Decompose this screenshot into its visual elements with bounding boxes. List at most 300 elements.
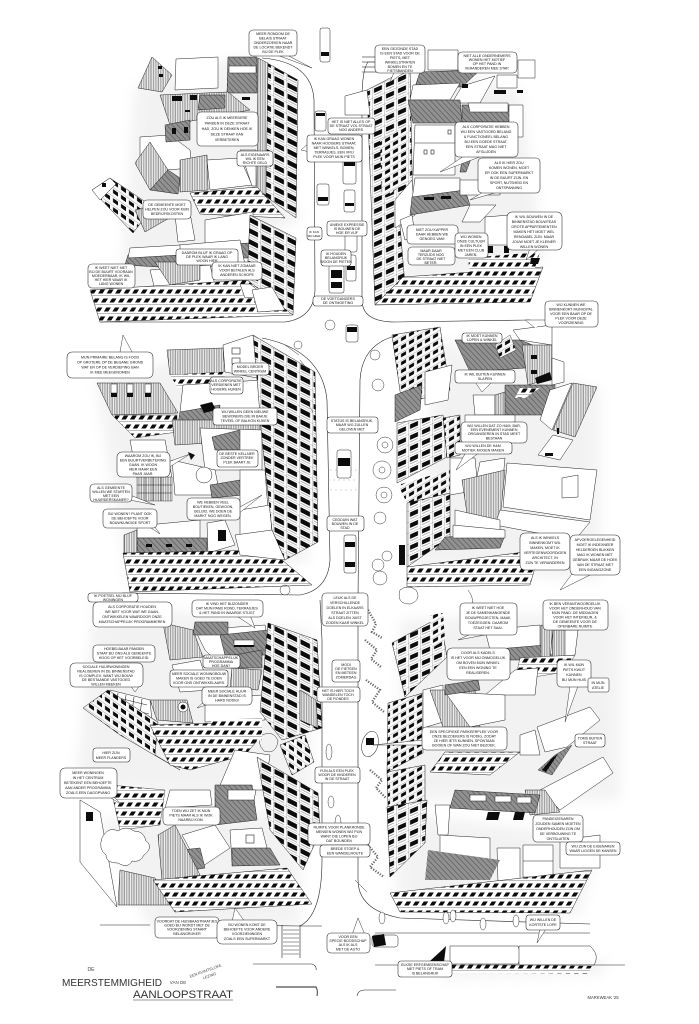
callout: meerdere panden: PANDEN IN DEZE STRAAT: [205, 122, 250, 126]
callout: erfgemeenschap: ELKSE ERFGEMEENSCHAP: [401, 963, 449, 967]
callout: bijzonder: & HET PAND IN WAARDE STIJGT: [199, 611, 256, 615]
callout: piets kwijt: [557, 660, 591, 722]
callout: samenhangende: JE DE SAMENHANGENDE: [466, 611, 511, 615]
callout: mij hier: [307, 227, 322, 240]
callout: huurderskamer: HUURDERSKAMER?: [93, 498, 129, 502]
block NW upper: long facade: [257, 58, 298, 218]
callout: buurtverbetering: WAAROM ZOU IK, BIJ: [125, 454, 162, 458]
callout: erfgemeenschap: [398, 961, 452, 977]
callout: beste kelner: [217, 450, 258, 467]
callout: afvoergelegenheid: MOET IK INDEXNEER: [577, 543, 614, 547]
block NW lower: [90, 215, 296, 322]
callout: primaire belang: [67, 335, 153, 378]
callout: kapper: NIET ZOU KAPPER: [416, 228, 449, 232]
callout: primaire belang: IK MEE MEEGENOMEN: [90, 370, 130, 374]
callout: graag wonen: MET WINKELS, BOMEN,: [314, 146, 354, 150]
callout: gezonde stad: WINKELSTRATEN: [385, 60, 416, 64]
callout: pandeigenaren: [533, 815, 583, 842]
callout: boutieken: BOUTIEKEN, GEWOON,: [193, 505, 233, 509]
callout: pieten: BELANGRIJK: [325, 256, 348, 260]
callout: binnenstad bouwen: WILLEN WONEN: [520, 245, 548, 249]
callout: pieten: [320, 250, 352, 266]
callout: boutieken: [187, 495, 262, 520]
callout: graag wonen: TERRASJES, EEN VRIJ: [314, 150, 354, 154]
callout: supermarkt: ONTSPANNING: [496, 186, 522, 190]
callout: leuk verschillende doelen: DOELEN IN ELKAARS: [327, 606, 364, 610]
callout: ruimte plankronde: WANT DIE LOPEN BIJ: [321, 834, 358, 838]
callout: huurwoningen: WILLEN MEEKEN: [91, 682, 121, 686]
callout: fiets: NAARBIJ KOM.: [178, 818, 204, 822]
callout: supermarkt: KOMEN WONEN, MOET: [489, 166, 530, 170]
callout: leuk verschillende doelen: ALS DOELEN JUIST: [328, 616, 363, 620]
callout: belais straat: ONDERZOEKEN NAAR: [254, 41, 293, 45]
callout: supermarkt: [470, 158, 540, 200]
callout: winkels maakel: MAKEN, MOET IK: [530, 546, 560, 550]
callout: gezonde stad: IS EEN STAD VOOR DE: [380, 52, 420, 56]
callout: bij de buurt: [88, 264, 135, 288]
callout: meerdere panden: DEZE STRAAT KAN: [211, 132, 244, 136]
callout: huurwoningen: SOCIALE HUURWONINGEN: [82, 665, 130, 669]
block SW lower: front row: [153, 868, 312, 912]
callout: piets kwijt: KUNNEN: [566, 673, 582, 677]
block NW upper: roofs: [135, 57, 257, 194]
callout: corporatie vastgoed: & FUNCTIONEEL BELANG: [464, 135, 508, 139]
callout: afvoergelegenheid: HELDERDEN BLIKKEN: [576, 548, 615, 552]
callout: afvoergelegenheid: MAG IK WONEN MET: [577, 553, 614, 557]
callout: binnenstad bouwen: IK WIL BOUWEN IN DE: [515, 215, 554, 219]
callout: afvoergelegenheid: EEN INGANGZONE: [579, 568, 612, 572]
callout: straat niet beter: [408, 247, 455, 265]
callout: graag wonen: PLEK VOOR MIJN PIETS: [313, 155, 355, 159]
callout: samenhangende: [458, 603, 517, 640]
callout: huurderskamer: ALS GEMEENTE: [97, 486, 126, 490]
callout: cultuur: ONZE CULTUUR: [457, 240, 485, 244]
callout: meerdere panden: [197, 112, 258, 146]
callout: sociale woningbouw: MEER SOCIALE WONINGBOUW: [172, 672, 227, 676]
callout: boutieken: GELUID, WE DOEN DE: [194, 510, 233, 514]
callout: binnenkort: [525, 301, 598, 328]
callout: ruimte plankronde: RUIMTE VOOR PLANKRONDE: [313, 826, 365, 830]
block centre-west: roofs: [97, 335, 272, 535]
callout: corporatie ontwikkelen: MAATSCHAPPELIJK PROGRAMMEREN: [99, 620, 166, 624]
callout: zomerdag: ZOMERDAG: [336, 676, 357, 680]
callout: straat alles: [328, 118, 375, 134]
callout: huurwoningen: DE BESTAANDE VASTGOED: [82, 678, 130, 682]
callout: afvoergelegenheid: [560, 535, 620, 590]
callout: cultuur: WIJ WONEN: [461, 235, 482, 239]
callout: huurderskamer: WILLEN WE STARTEN: [92, 490, 130, 494]
callout: supermarkt behoefte: VOORZIENINGEN: [232, 932, 262, 936]
callout: daarom blijf ik: WOON HIER: [196, 259, 218, 263]
title: DE: [88, 967, 95, 973]
callout: evenement: BESTAAN: [486, 436, 503, 440]
callout: voorziening: VOORDAT DE HUISBAASTRAATJES: [157, 920, 218, 924]
callout: kapper: GENOEG VAN!: [420, 237, 444, 241]
callout: winkels maakel: [520, 533, 570, 570]
block SE lower: [387, 765, 600, 882]
callout: ruimte plankronde: [308, 823, 370, 845]
callout: balkon: BEWONERS DIE IN BAKJE: [223, 414, 268, 418]
callout: supermarkt behoefte: BIJ WONEN KOMT DE: [228, 923, 266, 927]
callout: status belangrijk: [327, 417, 378, 433]
callout: huurwoningen: REALISEREN IN DE BINNENSTAD: [77, 670, 135, 674]
callout: mij hier: MIJ HIER: [308, 234, 321, 238]
callout: bijzonder: DAT MIJN PAND ROND, TERRASJES: [196, 606, 258, 610]
callout: graag wonen: [301, 135, 362, 162]
callout: afvoergelegenheid: VAN DE STRAAT MET: [577, 563, 614, 567]
block centre-east: roofs and courtyard: [435, 325, 597, 550]
callout: sociale woningbouw: VOOR ONS ONTWIKKELAARS.: [173, 681, 225, 685]
callout: kadels: OM BOVEN MIJN WINKEL: [456, 661, 500, 665]
callout: parkeerplek: BOOIEN OF WAN ZOU NIET BEZOEK.: [432, 744, 496, 748]
callout: corporatie vastgoed: ALS CORPORATIE HEBBEN: [462, 125, 510, 129]
callout: hoogbeleid: HOEBELBAAR PANDEN: [104, 647, 144, 651]
callout: parkeerplek: ONZE BEZOEKERS IS NODIG, ZODAT: [432, 734, 497, 738]
callout: parkeerplek: EEN SPECIFIEKE PARKEERPLEK VOOR: [430, 730, 499, 734]
callout: buurtverbetering: GAAN. IK WOON: [129, 463, 157, 467]
callout: kinderen: WOOR DE KINDEREN: [318, 773, 356, 777]
callout: kadels: REALISEREN.: [466, 671, 490, 675]
callout: sociale woningbouw: [170, 670, 228, 687]
callout: verantwoordelijk: VOOR HET INTERIEUR, &: [553, 616, 597, 620]
callout: niet zomaar: IK KAN NIET ZOMAAR: [218, 264, 256, 268]
callout: corporatie ontwikkelen: ONTWIKKELEN WAARDOOR ONZE: [102, 615, 162, 619]
block centre-west: front row: [123, 520, 312, 592]
callout: corporatie vastgoed: EEN STRAAT MAG NIET: [466, 145, 507, 149]
callout: parkeerplek: ZE HIER IETS KUNNEN. SPONTAAN: [434, 739, 495, 743]
callout: boodschap: ALS IK ALS: [339, 943, 358, 947]
callout: pandeigenaren: ZOUDEN SAMEN MOETEN: [535, 822, 581, 826]
callout: woningen: [88, 593, 138, 602]
callout: fiets: [163, 807, 220, 825]
road: street outlines: [100, 57, 590, 996]
callout: primaire belang: OP GROTERE OP DE BEGANE GROND: [77, 360, 144, 364]
callout: buurtverbetering: [117, 452, 190, 477]
callout: status belangrijk: MAAR WIJ ZULLEN: [336, 423, 369, 427]
callout: leuk verschillende doelen: STRAAT ZITTEN: [331, 611, 359, 615]
callout: atelier: [588, 678, 609, 692]
callout: unieke expressie: UNIEKE EXPRESSIE: [330, 223, 365, 227]
callout: meer wonen: [60, 768, 122, 805]
title: AANLOOPSTRAAT: [133, 989, 233, 1001]
callout: boodschap: VOOR EEN: [339, 935, 358, 939]
callout: unieke expressie: [327, 221, 367, 236]
callout: binnenstad bouwen: RENDABEL ZIJN. MAAR: [514, 235, 555, 239]
callout: corporatie ontwikkelen: WE NIET VOOR WAT WE GAAN,: [105, 610, 159, 614]
callout: bij de buurt: MOEDERBAAR, IK WIL: [92, 274, 130, 278]
callout: huurderskamer: MET EEN: [103, 494, 119, 498]
callout: belais straat: [249, 30, 312, 68]
callout: straat niet beter: MAAR DAAR: [420, 249, 442, 253]
callout: winkel centrum: [232, 363, 269, 375]
title: LEZING: [203, 972, 217, 980]
callout: woningen: WONINGEN: [103, 598, 123, 602]
callout: kadels: EEN EEN WONING TE: [459, 666, 497, 670]
callout: bouwkundige sport: DE BEHOEFTE VOOR: [112, 516, 149, 520]
callout: boodschap: [327, 918, 370, 953]
callout: straat alles: NOG ANDERS: [339, 128, 364, 132]
callout: binnenstad bouwen: [507, 212, 562, 260]
callout: primaire belang: WAT ER OP DE VERDIEPING BAN: [81, 366, 139, 370]
callout: wandelen: HET IS HIER TOCH: [322, 689, 354, 693]
callout: supermarkt behoefte: [217, 908, 277, 944]
callout: straat niet beter: BETER.: [425, 261, 437, 265]
callout: niet zomaar: ANDEREN SCHOPE: [220, 273, 254, 277]
callout: daarom blijf ik: [176, 249, 238, 265]
callout: sociale huur: HARD NODIG!: [215, 698, 239, 702]
callout: daarom blijf ik: DAAROM BLIJF IK GRAAG OP: [182, 251, 233, 255]
block SE upper: roofs and yard: [430, 625, 578, 727]
callout: gemeente moet helpen: DE GEMEENTE MOET: [148, 203, 187, 207]
callout: meer wonen: ZOALS EEN DAGOPVANG: [66, 791, 110, 795]
callout: hoogbeleid: STAAT BIJ ONS ALS GEMEENTE: [97, 652, 152, 656]
callout: corporatie vastgoed: [440, 122, 518, 172]
callout: kansen: [566, 842, 620, 855]
callout: boodschap: SPECIE BOODSCHAP: [329, 939, 367, 943]
callout: samenhangende: STAAT HET SAAI.: [473, 626, 503, 630]
long houses east side: [430, 707, 613, 815]
callout: zomerdag: MOOI: [341, 663, 351, 667]
callout: belais straat: BIJ DE PLEK: [262, 50, 284, 54]
block centre-east: front row: [407, 550, 540, 587]
callout: straat niet beter: DE STRAAT NIET: [416, 257, 446, 261]
callout: binnenkort: VOORZIENING: [558, 321, 584, 325]
block SW upper: roofs: [108, 622, 268, 723]
callout: fiets: PIETS MAAR ALS IK WIJK: [169, 814, 213, 818]
callout: bijzonder: IK VIND HET BIJZONDER: [206, 602, 249, 606]
callout: straat alles: HET IS NIET ALLES OP: [332, 120, 371, 124]
callout: piets kwijt: PIETS KWIJT: [563, 668, 586, 672]
callout: buiten straat: TOMS BUITEN: [578, 736, 603, 740]
cars on the street: [315, 28, 398, 947]
callout: sociale huur: MEER SOCIALE HUUR: [208, 690, 247, 694]
block SW upper: long facade: [260, 623, 322, 740]
callout: piets kwijt: IK WIL MIJN: [564, 663, 584, 667]
callout: bij de buurt: HET HIER WAAR IK: [95, 278, 128, 282]
callout: supermarkt: ER OOK EEN SUPERMARKT: [485, 171, 534, 175]
callout: buurtverbetering: HIER MAAR EEN: [129, 468, 158, 472]
callout: evenement: EEN EVENEMENT KUNNEN: [471, 428, 518, 432]
callout: pandeigenaren: ONTSLUITEN: [547, 837, 570, 841]
callout: hogere huren: VERDIENEN MET: [211, 383, 242, 387]
block centre-east: curved facades: [392, 327, 460, 567]
callout: samenhangende: TOEZEGGEN. DAAROM: [468, 621, 508, 625]
callout: huurderskamer: [90, 484, 155, 505]
callout: supermarkt behoefte: BEHOEFTE VOOR ANDERE: [224, 928, 271, 932]
callout: gemeente moet helpen: BEDRIJFSKOSTEN: [151, 212, 183, 216]
callout: buiten straat: STRAAT: [583, 741, 598, 745]
callout: ondernemers: VERANDEREN MEE STAP.: [465, 66, 509, 70]
callout: verantwoordelijk: IK BEN VERANTWOORDELIJK: [549, 602, 601, 606]
callout: leuk verschillende doelen: LEUK ALS DE: [334, 596, 357, 600]
callout: hogere huren: ALS CORPORATIE: [210, 379, 242, 383]
callout: motiek: WIJ WILLEN DE H&M: [465, 444, 501, 448]
callout: binnenstad bouwen: BINNENSTAD BOUWTEAS: [512, 220, 557, 224]
callout: atelier: ATELIE: [592, 686, 605, 690]
callout: evenement: WIJ WILLEN DAT ZO H&M, BAR,: [467, 424, 521, 428]
callout: straat alles: DE STRAAT VOL STRAAT: [330, 124, 373, 128]
callout: cultuur: IN EEN PLEK: [460, 244, 483, 248]
callout: winkels maakel: VERTEGENWOORDIGEN: [524, 551, 567, 555]
title: MEERSTEMMIGHEID: [62, 977, 162, 989]
title: VAN DE: [170, 980, 186, 985]
callout: supermarkt: SPORT, NUTSHEID EN: [490, 181, 529, 185]
callout: gemeente moet helpen: HELPEN ZOU VOOR MIJN: [145, 208, 189, 212]
callout: corporatie ontwikkelen: ALS CORPORATIE HOUDEN: [108, 605, 156, 609]
callout: pandeigenaren: DE VERBOUWING TE: [540, 832, 577, 836]
callout: verantwoordelijk: MIJN PAND. DE MIDDAGEN: [552, 611, 599, 615]
callout: bij de buurt: LANG WONEN: [99, 282, 124, 286]
callout: gemeente moet helpen: [143, 200, 191, 219]
callout: kapper: [407, 225, 458, 244]
callout: boutieken: MARKT NOG WEGEN.: [194, 514, 232, 518]
callout: meer wonen: BETEKENT EEN BEHOEFTE: [64, 781, 112, 785]
callout: wandelen: WANDELEN TOCH: [322, 693, 354, 697]
callout: voetgangers: [313, 296, 363, 306]
callout: flanders: [93, 748, 130, 762]
callout: kinderen: FIJN ALS EEN PLEK: [320, 769, 354, 773]
callout: primaire belang: MIJN PRIMAIRE BELANG IS FOOD: [81, 356, 139, 360]
callout: binnenkort: BINNENKORT MUNICIPAL: [549, 308, 593, 312]
callout: unieke expressie: IS BOUWEN DE: [334, 227, 361, 231]
callout: boutieken: WE HEBBEN VEEL: [197, 500, 229, 504]
callout: voorziening: GOED BIJ WORDT MET DE: [164, 924, 210, 928]
callout: programma: HOE DAN?: [212, 664, 230, 668]
block SE upper: facades: [387, 613, 447, 772]
callout: lopen: [462, 333, 502, 343]
callout: bijzonder: [192, 600, 263, 628]
callout: ondernemers: NIET ALLE ONDERNEMERS: [463, 54, 511, 58]
block SE lower: front row: [390, 870, 592, 913]
callout: binnenkort: PLEK VOOR DEZE: [555, 316, 587, 320]
callout: hoogbeleid: [93, 645, 155, 662]
people walking on the pavement: [326, 744, 519, 930]
callout: flanders: MEER FLANDERS: [96, 756, 127, 760]
callout: leuk verschillende doelen: VERSCHILLENDE: [330, 601, 361, 605]
callout: motiek: MOTIEK MOGEN MAKEN: [462, 448, 504, 452]
callout: kadels: DOOR ALS KADELS: [461, 651, 495, 655]
callout: ondernemers: [458, 52, 517, 73]
callout: winkels maakel: ZIJN TE VERANDEREN: [525, 561, 565, 565]
callout: status belangrijk: STATUS IS BELANGRIJK,: [331, 419, 373, 423]
callout: gezonde stad: [375, 45, 425, 82]
callout: binnenkort: WIJ KUNNEN WE: [556, 303, 586, 307]
callout: binnenstad bouwen: GROTE APPARTEMENTEN: [511, 225, 557, 229]
callout: ruimte plankronde: MENSEN WONEN WIJ PIJN: [316, 830, 362, 834]
callout: brede stoep: EEN WANDELROUTE: [327, 852, 364, 856]
callout: wandelen: DE RONDES: [327, 697, 349, 701]
callout: piets kwijt: BIJ MIJN HUIS: [562, 678, 587, 682]
callout: beste kelner: ZONDER VERTREK: [220, 456, 254, 460]
callout: eigenaars: WIL IK EEN: [245, 157, 265, 161]
callout: programma: [203, 655, 240, 668]
callout: kansen: WIJ ZIJN DE EIGENAREN: [572, 844, 615, 848]
callout: bouwen in de stad: CEDDUIN WAT: [333, 518, 358, 522]
callout: corporatie vastgoed: WIJ EEN VASTGOED BELANG: [461, 130, 512, 134]
callout: slapen: SLAPEN: [478, 377, 492, 381]
callout: buurtverbetering: EEN BUURTVERBETERING: [120, 458, 166, 462]
callout: straat niet beter: TERZIJDS NOG: [418, 253, 444, 257]
callout: atelier: IN MIJN: [592, 681, 605, 685]
callout: bij de buurt: BIJ DE BUURT VOORAAN: [89, 270, 133, 274]
callout: evenement: [461, 422, 527, 443]
callout: lopen: LOPEN & WINKEL: [467, 338, 497, 342]
callout: eigenaars: RICHTE GELD: [243, 161, 267, 165]
callout: woningen: IK POETSEL MIJ BLIJF: [94, 594, 133, 598]
callout: bouwen in de stad: BOUWEN IN DE: [332, 522, 359, 526]
callout: voorziening: BELANGRIJKER: [173, 932, 201, 936]
callout: huurwoningen: IS COMPLEX. WANT WIJ BOUW: [79, 674, 133, 678]
callout: kinderen: [315, 767, 360, 783]
callout: graag wonen: NAAR HOOGERE STRAAT,: [312, 142, 357, 146]
callout: daarom blijf ik: DE PLEK WAAR IK LANG: [186, 255, 228, 259]
callout: programma: PROGRAMMA: [209, 660, 234, 664]
callout: ondernemers: OP HET PAND IN: [473, 62, 502, 66]
callout: balkon: WIJ WILLEN GEEN NIEUWE: [221, 410, 269, 414]
title: [62, 963, 233, 1001]
callout: bij de buurt: IK WEET NIET MET: [95, 266, 128, 270]
callout: sociale huur: [197, 687, 252, 708]
callout: gezonde stad: FIETSBANDEN: [387, 69, 413, 73]
callout: unieke expressie: HOE ER VIJF: [336, 231, 359, 235]
callout: kadels: IS HET VOOR MIJ ONMOGELIJK: [451, 656, 506, 660]
callout: corporatie ontwikkelen: [93, 602, 172, 627]
callout: hogere huren: [210, 377, 243, 394]
callout: lopen: IK MOET KUNNEN: [467, 334, 498, 338]
callout: evenement: ORGANISEREN IN STAD MEET: [468, 432, 521, 436]
signature: MARKWEAK '25: [587, 995, 619, 1000]
background shading around the blocks: [75, 55, 620, 978]
callout: gezonde stad: EEN GEZONDE STAD: [382, 47, 419, 51]
callout: programma: MAATSCHAPPELIJK: [204, 656, 239, 660]
callout: leuk verschillende doelen: [322, 593, 368, 626]
callout: meerdere panden: VERBETEREN: [215, 138, 240, 142]
callout: leuk verschillende doelen: ZODEN KAAR WINKEL: [326, 621, 364, 625]
callout: niet zomaar: VOOR BETALEN ALS: [219, 268, 255, 272]
block NW end house: [92, 178, 253, 258]
callout: pandeigenaren: ONDERHOUDEN ZIJN OM: [536, 827, 580, 831]
callout: meer wonen: MEER WONINGEN: [72, 771, 104, 775]
block NE: tall facade: [345, 68, 415, 305]
callout: samenhangende: BOUWPROJECTEN, MAAK: [465, 616, 511, 620]
callout: slapen: IK WIL BUITEN KUNNEN: [464, 372, 506, 376]
callout: winkels maakel: ALS IK WINKELS: [531, 536, 560, 540]
greenery along the street: [259, 320, 472, 892]
callout: cultuur: [455, 233, 488, 258]
callout: boodschap: MET DE AUTO: [336, 948, 360, 952]
callout: afvoergelegenheid: GEBRUIK MAAR DE HOEK: [573, 558, 618, 562]
callout: verantwoordelijk: DE GEMEENTE VOOR DE: [553, 620, 597, 624]
callout: parkeerplek: [373, 727, 507, 750]
callout: winkel centrum: WINKEL CENTRUM: [234, 370, 266, 374]
title: EEN RUIMTELIJKE: [189, 963, 223, 979]
callout: cultuur: MET EEN CLUB: [458, 248, 485, 252]
callout: corporatie vastgoed: BIJ EEN GOEDE STRAAT,: [464, 140, 508, 144]
callout: bouwkundige sport: BIJ WONEN? PLANT OOK: [108, 512, 152, 516]
callout: zomerdag: DE FIETSEN: [335, 667, 357, 671]
callout: kortste lope: WIJ WILLEN DE: [530, 918, 557, 922]
callout: buiten straat: [575, 734, 605, 747]
callout: beste kelner: PLEK BAART JE: [223, 460, 251, 464]
callout: verantwoordelijk: OPENBARE RUIMTE: [558, 624, 593, 628]
callout: sociale woningbouw: MAKEN IS GOED TE DOEN: [176, 676, 222, 680]
callout: bouwen in de stad: [327, 516, 364, 531]
callout: graag wonen: IK KAN GRAAG WONEN: [314, 137, 355, 141]
callout: gezonde stad: BOMEN EN TE: [388, 65, 413, 69]
callout: verantwoordelijk: VOOR HET ONDERHOUD VAN: [549, 606, 601, 610]
callout: erfgemeenschap: MET PIETS OF TRAM: [407, 967, 443, 971]
callout: eigenaars: ALS EIGENAARS: [241, 153, 270, 157]
